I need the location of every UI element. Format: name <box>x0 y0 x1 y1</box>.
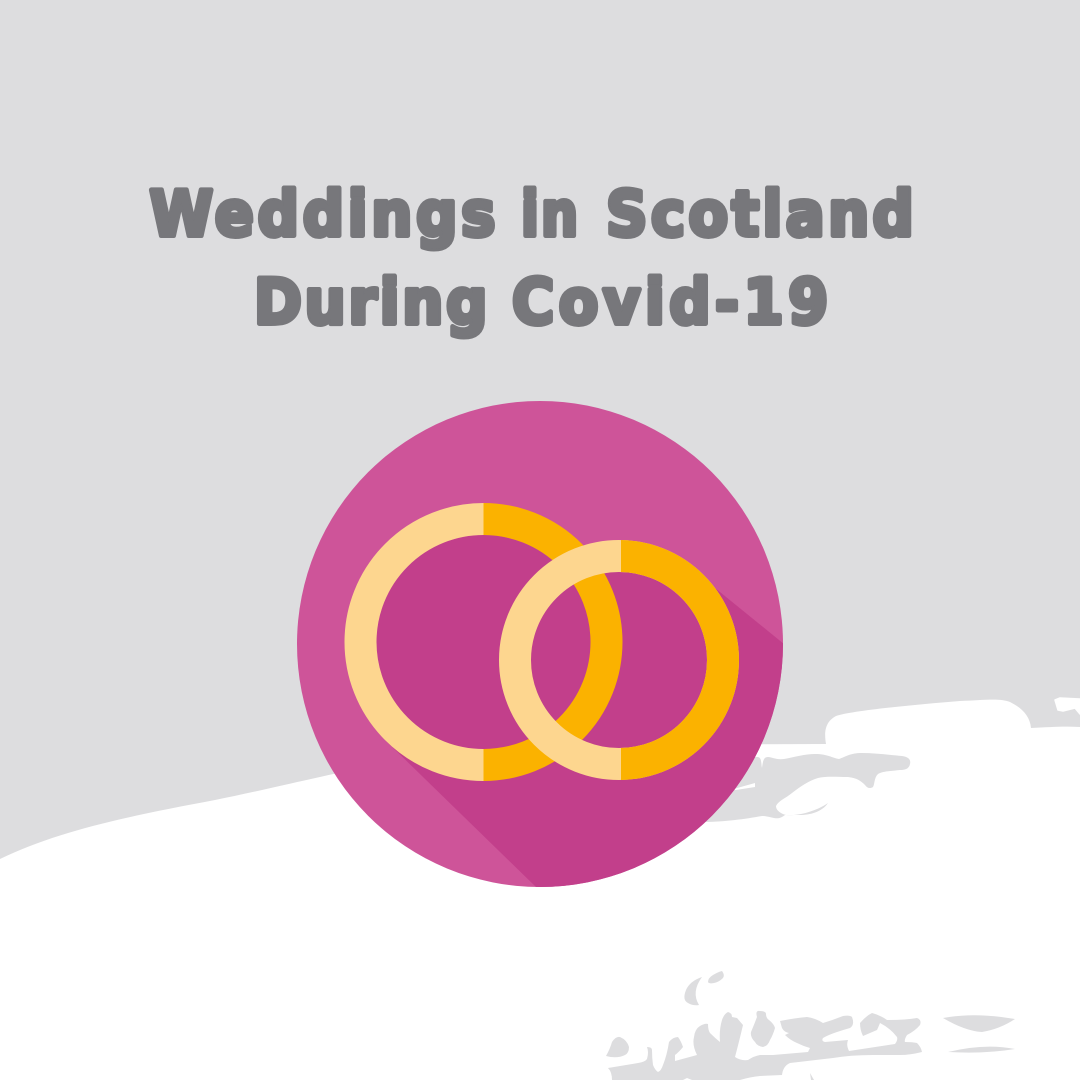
white strip in coastline <box>730 783 755 790</box>
white islet top right <box>1055 698 1080 714</box>
island: crescent <box>684 977 702 1005</box>
long shadow <box>385 588 800 887</box>
island: central blob <box>751 1011 775 1047</box>
ring centre fill: right <box>531 572 707 748</box>
island: small north <box>708 971 724 983</box>
title: Weddings <box>150 179 495 251</box>
ring centre fill: left <box>376 535 590 749</box>
island: east lens <box>943 1015 1015 1032</box>
gray islands at bottom right <box>606 971 1015 1080</box>
pink circle badge <box>297 401 800 887</box>
title: Scotland <box>606 179 914 251</box>
title: During <box>254 267 487 339</box>
wedding ring: back <box>360 519 606 765</box>
island: east sliver <box>948 1047 1015 1053</box>
white land mass <box>0 700 1080 1080</box>
title: in <box>521 178 578 251</box>
main archipelago <box>608 1012 922 1080</box>
wedding ring: front <box>515 556 723 764</box>
title: Covid-19 <box>512 267 828 339</box>
title <box>150 178 914 339</box>
gray coastline near circle <box>700 753 910 822</box>
island: south sliver <box>810 1073 814 1080</box>
circle background <box>297 401 783 887</box>
island: west <box>606 1037 629 1057</box>
